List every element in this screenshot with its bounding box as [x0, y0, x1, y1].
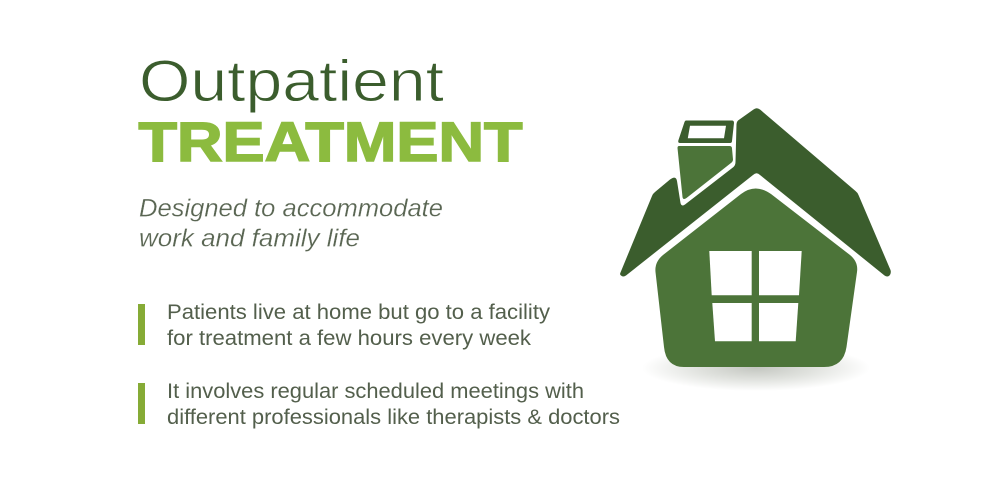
bullet bar [138, 304, 145, 345]
bullet text: Patients live at home but go to a facility [167, 301, 551, 324]
bullet text [167, 380, 620, 429]
subtitle: work and family life [139, 224, 360, 252]
house body [655, 188, 857, 367]
bullet text: for treatment a few hours every week [167, 327, 532, 350]
bullet text [167, 301, 551, 350]
bullet bar [138, 383, 145, 424]
bullet: living at home [138, 301, 551, 350]
bullet text: different professionals like therapists & doctors [167, 406, 620, 429]
subtitle [139, 194, 443, 252]
icon: house [620, 108, 891, 391]
chimney body [678, 146, 733, 199]
roof [620, 108, 891, 276]
house shadow [642, 345, 870, 391]
title: Outpatient: Outpatient [139, 49, 444, 114]
window [709, 251, 802, 341]
bullet text: It involves regular scheduled meetings with [167, 380, 584, 403]
title: TREATMENT: TREATMENT [138, 110, 522, 173]
subtitle: Designed to accommodate [139, 194, 443, 222]
chimney top [678, 120, 734, 143]
bullet: scheduled meetings [138, 380, 620, 429]
